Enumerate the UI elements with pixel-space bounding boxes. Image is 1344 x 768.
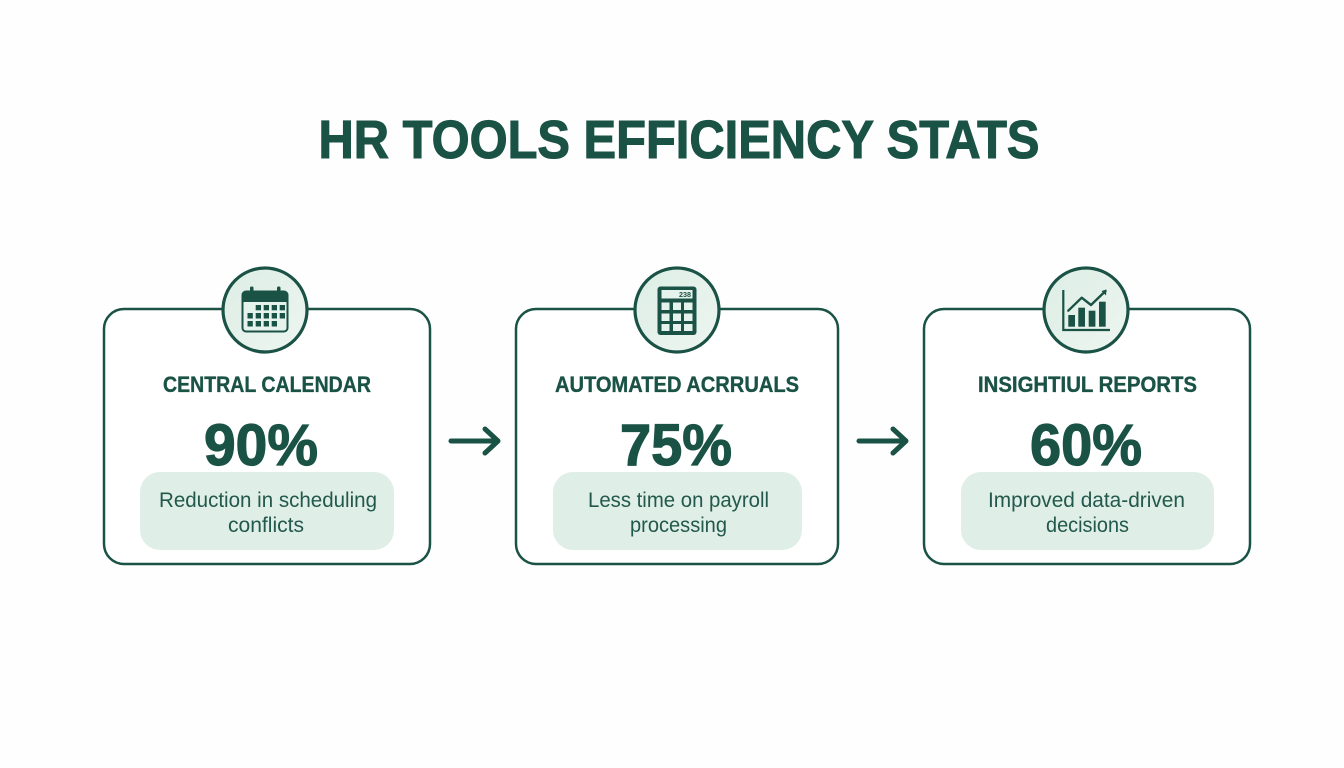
stat: 90%: 90% xyxy=(204,413,318,478)
panel: central calendar xyxy=(104,268,430,564)
description pill: processing xyxy=(630,514,727,537)
stat: 75%: 75% xyxy=(620,413,732,478)
description pill: Improved data-driven xyxy=(988,489,1185,512)
card outline xyxy=(516,309,838,564)
heading: central calendar: CENTRAL CALENDAR xyxy=(163,372,371,397)
icon: calendar xyxy=(223,268,307,352)
description pill xyxy=(553,472,802,550)
panel: insightful reports xyxy=(924,268,1250,564)
description pill: decisions xyxy=(1046,514,1129,537)
arrow: accruals to reports xyxy=(859,429,906,453)
heading: insightful reports: INSIGHTIUL REPORTS xyxy=(978,372,1197,397)
description pill: Less time on payroll xyxy=(588,489,769,512)
stat: 60%: 60% xyxy=(1030,413,1142,478)
description pill xyxy=(961,472,1214,550)
icon: calculator xyxy=(635,268,719,352)
title: HR TOOLS EFFICIENCY STATS xyxy=(318,111,1040,170)
description pill: conflicts xyxy=(228,514,304,537)
icon: bar chart with trend line xyxy=(1044,268,1128,352)
card outline xyxy=(104,309,430,564)
arrow: calendar to accruals xyxy=(451,429,498,453)
icon: calculator: 238 xyxy=(679,292,691,299)
description pill xyxy=(140,472,394,550)
heading: automated accruals: AUTOMATED ACRRUALS xyxy=(555,372,799,397)
card outline xyxy=(924,309,1250,564)
description pill: Reduction in scheduling xyxy=(159,489,377,512)
panel: automated accruals xyxy=(516,268,838,564)
